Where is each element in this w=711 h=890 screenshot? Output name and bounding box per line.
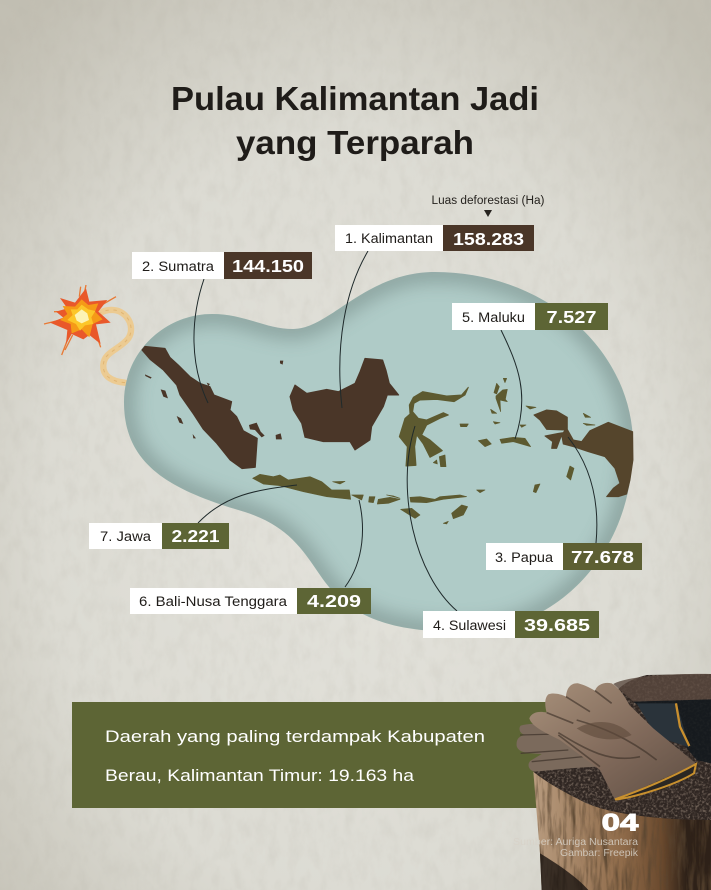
stump top [533,674,711,820]
islands: Jawa and Nusa Tenggara [253,455,485,524]
legend: Luas deforestasi: Luas deforestasi (Ha) [432,195,545,207]
small islands near Sumatra [145,361,283,439]
title: Pulau Kalimantan Jadi [171,80,539,117]
label: Sumatra: 2. Sumatra [142,259,215,274]
gloves [517,683,697,800]
upper glove [529,683,697,800]
label: Sulawesi [423,611,599,638]
page number: 04 [602,810,639,837]
label: Kalimantan: 1. Kalimantan [345,231,433,246]
label: Maluku: 7.527 [546,307,596,327]
lower glove [517,724,600,772]
island: Sumatra [142,346,257,469]
island: Sulawesi [399,387,468,466]
map blob [124,272,633,632]
label: Jawa [89,523,229,549]
leader lines [194,251,597,611]
photo: tree stump with gloves [517,674,711,890]
source credit: Sumber: Auriga Nusantara [513,837,638,848]
map: central and eastern islands [253,358,633,524]
dirt patch [577,722,632,739]
label: Bali-Nusa Tenggara [130,588,371,614]
icon: bomb fuse [101,310,131,383]
stump body [533,772,711,890]
callout banner [72,702,552,808]
island: Kalimantan [290,358,399,450]
source credit: Gambar: Freepik [560,848,639,859]
label: Sulawesi: 39.685 [524,615,590,635]
callout banner: Berau, Kalimantan Timur: 19.163 ha [105,767,415,785]
map: western islands [142,346,283,469]
label: Papua [486,543,642,570]
glove seams [547,691,657,767]
stump shadow [540,853,588,890]
legend: Luas deforestasi [432,195,545,217]
label: Papua: 77.678 [571,547,634,567]
label: Kalimantan: 158.283 [453,229,524,249]
label: Kalimantan [335,225,534,251]
stump rim [613,674,711,702]
source credit [513,837,639,859]
label: Maluku: 5. Maluku [462,310,525,325]
cuff trim [676,703,689,746]
callout banner: Daerah yang paling terdampak Kabupaten [105,728,485,746]
label: Bali-Nusa Tenggara: 4.209 [307,591,361,611]
inner cuff lining [637,703,689,747]
icon: explosion [44,285,116,355]
island: Papua [534,410,633,497]
label: Maluku [452,303,608,330]
label: Papua: 3. Papua [495,550,554,565]
title [171,80,539,161]
label: Bali-Nusa Tenggara: 6. Bali-Nusa Tenggara [139,594,288,609]
label: Jawa: 2.221 [172,526,220,546]
label: Sumatra [132,252,312,279]
title: yang Terparah [236,124,474,161]
label: Sumatra: 144.150 [232,256,304,276]
label: Jawa: 7. Jawa [100,529,152,544]
islands: Maluku [460,378,595,493]
label: Sulawesi: 4. Sulawesi [433,618,506,633]
